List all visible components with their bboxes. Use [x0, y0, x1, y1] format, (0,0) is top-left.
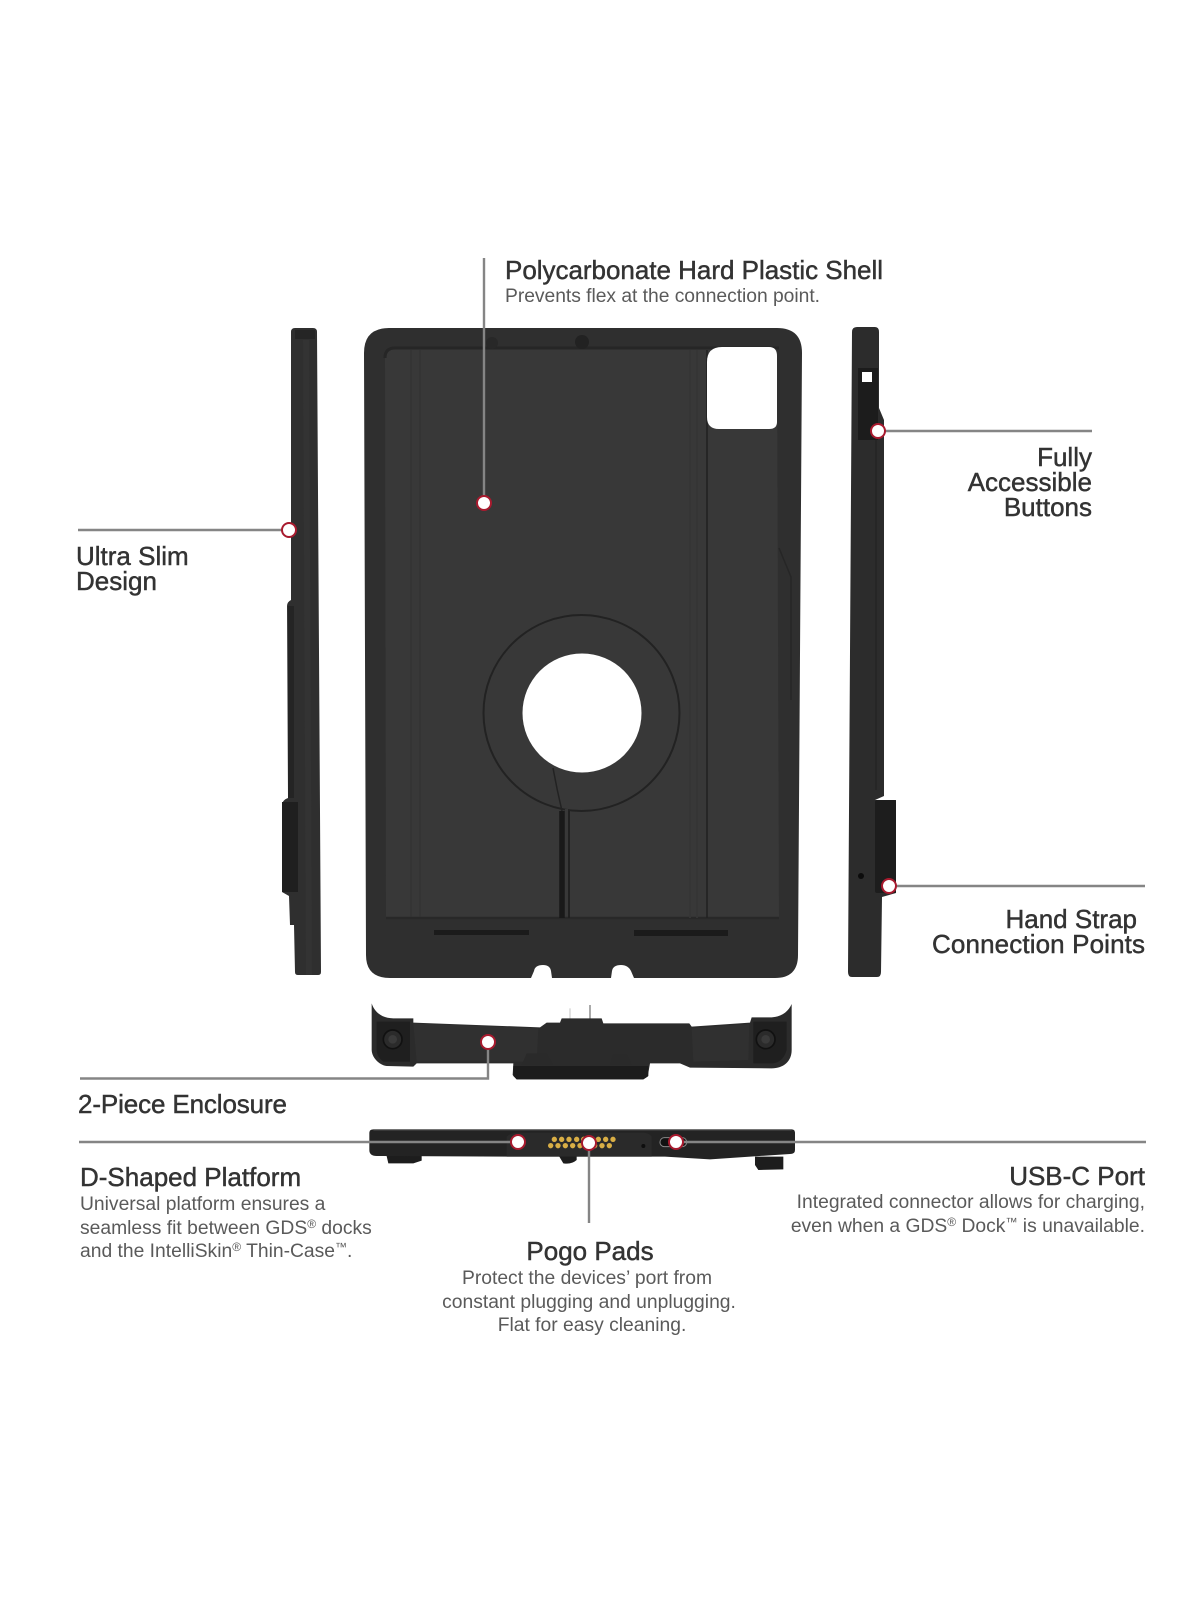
callout: d-shaped platform: docks: [316, 1218, 372, 1239]
callout: usb-c port: USB-C Port: [1009, 1161, 1146, 1191]
callout: d-shaped platform: ®: [307, 1217, 316, 1231]
callout: usb-c port: Integrated connector allows for charging,: [797, 1192, 1145, 1213]
callout: accessible buttons: Accessible: [968, 467, 1092, 497]
callout: 2-piece enclosure: 2-Piece Enclosure: [78, 1089, 287, 1119]
callout: d-shaped platform: seamless fit between GDS: [80, 1218, 307, 1239]
callout: pogo pads: Protect the devices’ port from: [462, 1268, 712, 1289]
callout: d-shaped platform: Thin-Case: [241, 1241, 335, 1262]
callout: usb-c port: ®: [947, 1215, 956, 1229]
bottom slots: [434, 930, 529, 935]
callout: d-shaped platform: D-Shaped Platform: [80, 1162, 301, 1192]
callout: ultra slim design: [76, 541, 189, 596]
callout: pogo pads: Pogo Pads: [526, 1236, 654, 1266]
callout: accessible buttons: Fully: [1037, 442, 1092, 472]
callout markers: [282, 424, 896, 1150]
callout: usb-c port: [791, 1161, 1146, 1237]
shell outer body: [364, 328, 802, 978]
callout: ultra slim design: Design: [76, 566, 157, 596]
callout: usb-c port: Dock: [956, 1216, 1006, 1237]
callout: hand strap: [932, 904, 1145, 959]
callout: d-shaped platform: Universal platform ensures a: [80, 1194, 326, 1215]
callout: d-shaped platform: ™: [335, 1240, 347, 1254]
callout: usb-c port: is unavailable.: [1017, 1216, 1145, 1237]
callout: d-shaped platform: ®: [232, 1240, 241, 1254]
callout: d-shaped platform: .: [347, 1241, 352, 1262]
camera cutout: [707, 347, 777, 429]
callout: d-shaped platform: and the IntelliSkin: [80, 1241, 232, 1262]
leader lines: [78, 258, 1146, 1223]
callout: accessible buttons: [968, 442, 1092, 522]
callout: pogo pads: Flat for easy cleaning.: [498, 1315, 686, 1336]
callout: polycarbonate shell: Polycarbonate Hard Plastic Shell: [505, 255, 883, 285]
left side view of the case: [282, 328, 321, 975]
callout: hand strap: Hand Strap: [1005, 904, 1137, 934]
bottom edge piece with pogo pads: [369, 1129, 795, 1170]
top notches: [486, 337, 498, 349]
callout: polycarbonate shell: [505, 255, 883, 307]
callout: pogo pads: constant plugging and unplugging.: [442, 1292, 736, 1313]
callout: hand strap: Connection Points: [932, 929, 1145, 959]
right side view of the case: [848, 327, 896, 977]
callout: d-shaped platform: [80, 1162, 372, 1262]
callout: polycarbonate shell: Prevents flex at the connection point.: [505, 286, 820, 307]
central rear shell: [364, 328, 802, 978]
callout: ultra slim design: Ultra Slim: [76, 541, 189, 571]
mounting ring: [484, 615, 680, 811]
top edge piece of enclosure: [372, 1003, 792, 1079]
shell inner recess: [385, 348, 779, 918]
callout: pogo pads: [442, 1236, 736, 1336]
callout: usb-c port: ™: [1005, 1215, 1017, 1229]
callout: usb-c port: even when a GDS: [791, 1216, 947, 1237]
callout: accessible buttons: Buttons: [1004, 492, 1092, 522]
